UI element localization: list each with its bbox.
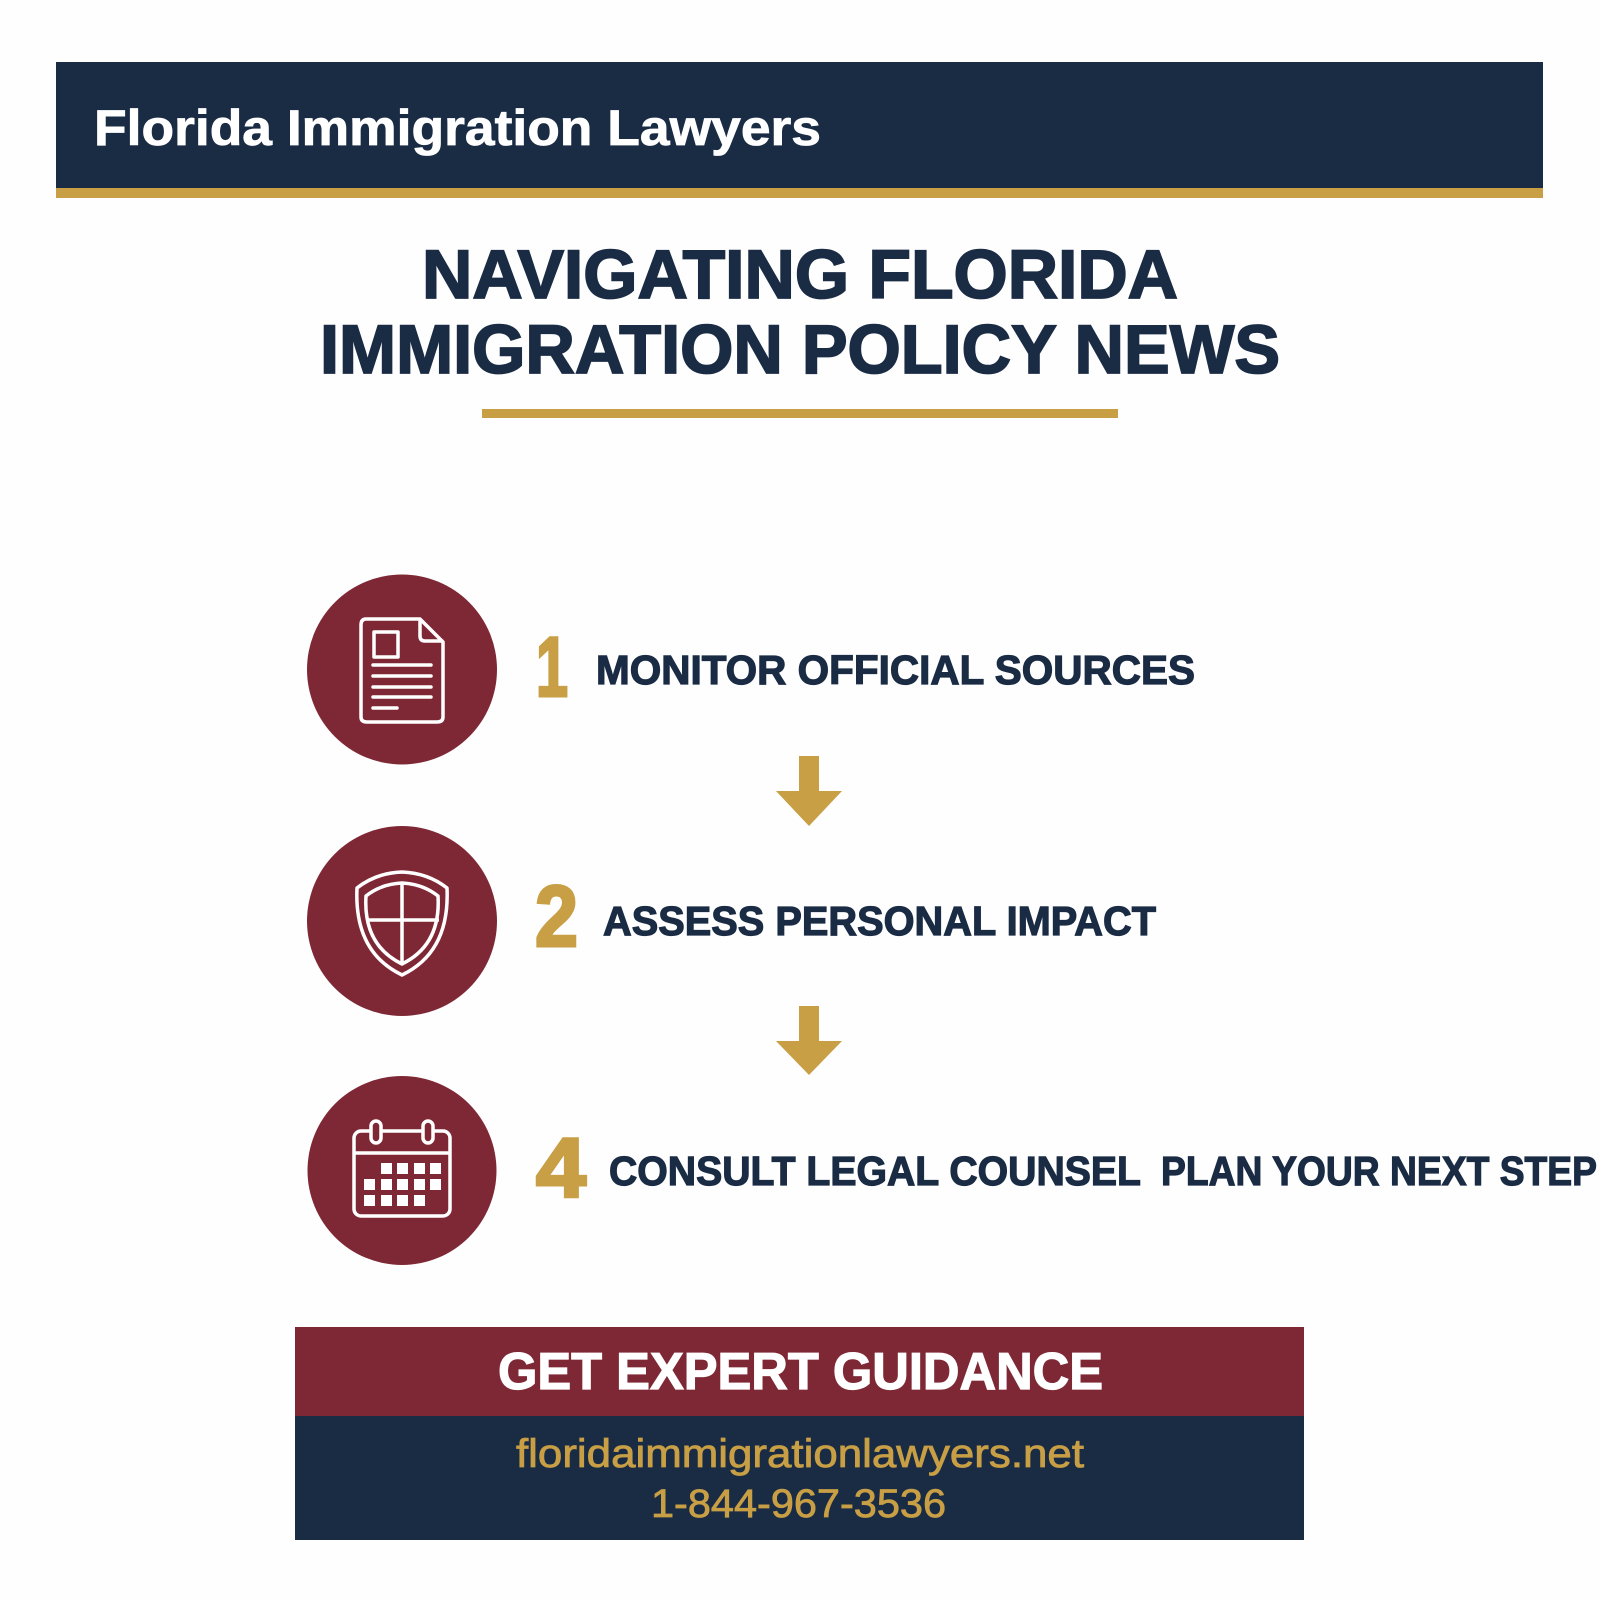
website: floridaimmigrationlawyers.net: [516, 1432, 1084, 1476]
label: consult legal counsel: CONSULT LEGAL COUNSEL: [609, 1148, 1141, 1194]
label: monitor official sources: MONITOR OFFICIAL SOURCES: [596, 647, 1195, 693]
step 4: [308, 1076, 1597, 1265]
title: [320, 236, 1280, 388]
number 4: 4: [536, 1121, 586, 1215]
icon: document: [307, 574, 497, 764]
number 2: 2: [535, 869, 578, 965]
phone: 1-844-967-3536: [651, 1482, 946, 1526]
header banner: [56, 62, 1543, 198]
label: assess personal impact: ASSESS PERSONAL IMPACT: [603, 898, 1156, 944]
icon: calendar: [308, 1076, 496, 1265]
title: IMMIGRATION POLICY NEWS: [320, 311, 1280, 388]
step 1: [307, 574, 1195, 764]
call to action panel: [295, 1327, 1304, 1540]
number 1: 1: [536, 620, 568, 714]
arrow down 2: [776, 1006, 842, 1075]
arrow down 1: [776, 756, 842, 826]
title underline: [482, 409, 1118, 418]
firm name: Florida Immigration Lawyers: [94, 100, 821, 156]
step 2: [307, 826, 1156, 1016]
icon: shield: [307, 826, 497, 1016]
title: NAVIGATING FLORIDA: [422, 236, 1178, 313]
cta heading: GET EXPERT GUIDANCE: [498, 1343, 1103, 1401]
